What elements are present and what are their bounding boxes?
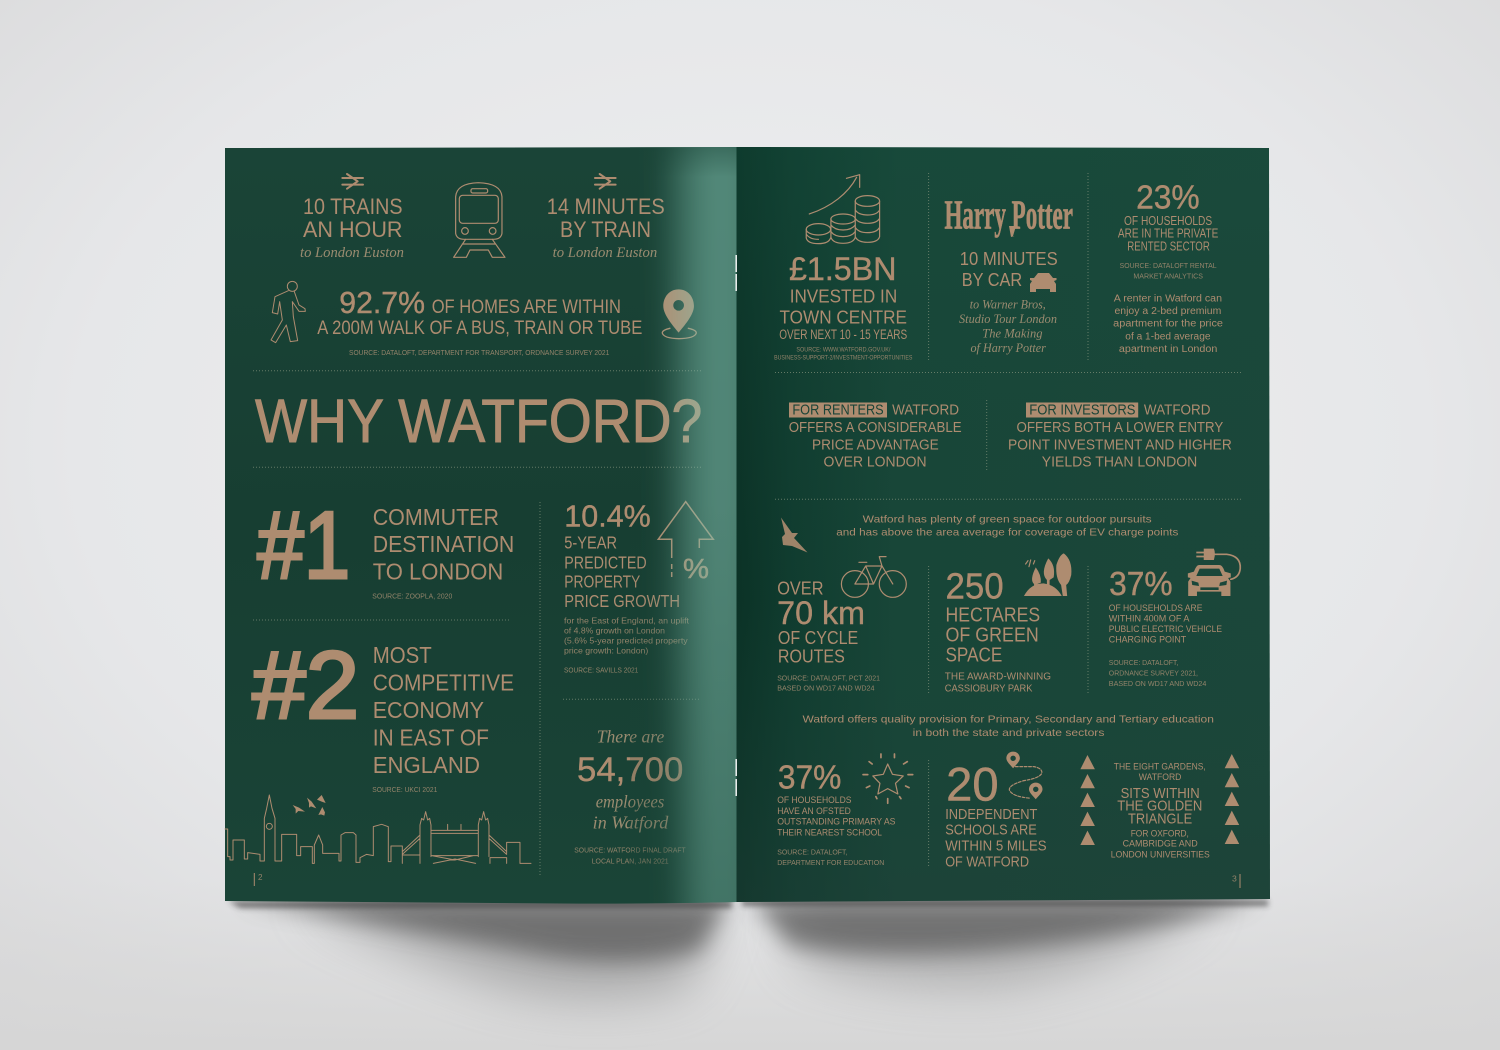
text: education intro: Watford offers quality provision for Primary, Secondary and Tertiary education: [802, 714, 1214, 726]
panel: property price growth: [564, 499, 713, 674]
panel: golden triangle: CAMBRIDGE AND: [1123, 839, 1198, 850]
panel: harry potter: to Warner Bros,: [970, 296, 1046, 311]
panel: electric vehicle charging: [1109, 549, 1240, 688]
panel: for investors: POINT INVESTMENT AND HIGHER: [1008, 436, 1232, 453]
divider: [253, 619, 511, 621]
panel: investment in town centre: BUSINESS-SUPPORT-2/INVESTMENT-OPPORTUNITIES: [774, 355, 912, 361]
panel: property price growth: 5-YEAR: [564, 533, 617, 553]
panel: property price growth: PROPERTY: [564, 572, 641, 592]
icon: national rail right: [595, 174, 616, 189]
panel: cycle routes: ROUTES: [778, 646, 845, 666]
divider: [1087, 566, 1089, 695]
panel: green space: THE AWARD-WINNING: [945, 671, 1051, 683]
panel: for investors: [1008, 402, 1232, 471]
panel: harry potter: [944, 191, 1073, 355]
divider: [775, 498, 1242, 500]
divider: [775, 372, 1242, 374]
panel: investment in town centre: £1.5BN: [789, 251, 896, 287]
panel: employees: employees: [596, 791, 664, 811]
panel: private rented sector: ARE IN THE PRIVATE: [1118, 227, 1218, 241]
icon: map pin: [662, 289, 696, 339]
panel: golden triangle: SITS WITHIN: [1121, 786, 1200, 802]
text: page number 3: [1232, 874, 1240, 888]
icon: electric car: [1188, 549, 1240, 596]
panel: cycle routes: SOURCE: DATALOFT, PCT 2021: [777, 673, 880, 682]
text: page number 2: [254, 873, 263, 886]
panel: investment in town centre: SOURCE: WWW.WATFORD.GOV.UK/: [796, 348, 891, 354]
text: 92.7% of homes: [317, 285, 642, 357]
text: 92.7% of homes: SOURCE: DATALOFT, DEPARTMENT FOR TRANSPORT, ORDNANCE SURVEY 2021: [349, 348, 609, 357]
text: education intro: [802, 714, 1214, 739]
panel: number 2 competitive economy: SOURCE: UKCI 2021: [372, 785, 437, 794]
panel: for investors: WATFORD: [1144, 402, 1211, 419]
panel: number 1 commuter destination: SOURCE: ZOOPLA, 2020: [372, 591, 452, 600]
panel: private rented sector: [1113, 179, 1223, 355]
text: 92.7% of homes: A 200M WALK OF A BUS, TRAIN OR TUBE: [317, 318, 642, 339]
icon: walking person: [271, 281, 305, 343]
panel: number 1 commuter destination: TO LONDON: [373, 558, 503, 584]
panel: independent schools: 20: [946, 758, 999, 811]
divider: [928, 173, 930, 362]
panel: independent schools: OF WATFORD: [945, 854, 1029, 871]
panel: harry potter: 10 MINUTES: [960, 248, 1058, 269]
panel: employees: [574, 727, 686, 865]
panel: ofsted: THEIR NEAREST SCHOOL: [777, 827, 882, 838]
panel: employees: LOCAL PLAN, JAN 2021: [592, 856, 669, 865]
icon: star: [863, 754, 913, 803]
panel: golden triangle: [1080, 754, 1239, 860]
panel: property price growth: PREDICTED: [564, 552, 647, 572]
panel: property price growth: for the East of England, an uplift: [564, 616, 690, 626]
panel: ofsted: SOURCE: DATALOFT,: [777, 847, 848, 856]
page fold highlight: [630, 147, 736, 903]
icon: up arrow with percent: %: [683, 553, 709, 584]
panel: left page top, train facts: [300, 174, 665, 261]
panel: employees: in Watford: [593, 812, 669, 832]
text: green space intro: Watford has plenty of green space for outdoor pursuits: [863, 514, 1152, 526]
divider: [1087, 173, 1089, 362]
panel: for renters: [789, 402, 962, 471]
panel: golden triangle: THE EIGHT GARDENS,: [1114, 761, 1206, 772]
panel: number 2 competitive economy: COMPETITIVE: [373, 669, 514, 695]
text: education intro: in both the state and private sectors: [913, 727, 1104, 739]
panel: private rented sector: enjoy a 2-bed premium: [1114, 306, 1221, 317]
text: 14 minutes: [547, 194, 665, 261]
panel: electric vehicle charging: OF HOUSEHOLDS ARE: [1109, 603, 1202, 614]
divider top: [253, 370, 703, 372]
panel: green space: OF GREEN: [946, 623, 1039, 646]
panel: electric vehicle charging: PUBLIC ELECTRIC VEHICLE: [1109, 624, 1222, 635]
book shadow: [228, 900, 1268, 998]
panel: electric vehicle charging: BASED ON WD17 AND WD24: [1109, 679, 1206, 688]
text: page number 2: 2: [258, 873, 263, 882]
panel: private rented sector: of a 1-bed average: [1125, 331, 1211, 342]
text: 10 trains: AN HOUR: [303, 217, 402, 242]
icon: triangles left: [1080, 755, 1095, 845]
text: green space intro: and has above the area average for coverage of EV charge points: [836, 526, 1178, 538]
icon: lightning tail: [1009, 226, 1016, 237]
panel: cycle routes: 70 km: [777, 595, 865, 631]
panel: walking statistic: [271, 281, 696, 357]
panel: property price growth: PRICE GROWTH: [564, 591, 680, 611]
icon: trees: [1024, 553, 1071, 596]
title: WHY WATFORD?: [255, 387, 702, 455]
panel: for renters: WATFORD: [892, 402, 959, 419]
panel: electric vehicle charging: SOURCE: DATALOFT,: [1109, 658, 1178, 667]
panel: ofsted: 37%: [778, 758, 841, 795]
panel: investment in town centre: INVESTED IN: [790, 286, 897, 307]
text: 92.7% of homes: 92.7%: [339, 285, 425, 320]
panel: green space: SPACE: [946, 643, 1002, 666]
panel: employees: 54,700: [577, 751, 683, 789]
divider: [928, 566, 930, 695]
panel: electric vehicle charging: 37%: [1109, 565, 1173, 602]
panel: for renters: FOR RENTERS: [792, 402, 884, 419]
icon: up arrow with percent: [658, 502, 713, 584]
panel: for investors: FOR INVESTORS: [1029, 402, 1136, 419]
panel: number 1 commuter destination: [257, 492, 514, 600]
divider: [928, 760, 930, 866]
panel: independent schools: WITHIN 5 MILES: [945, 838, 1047, 855]
panel: golden triangle: TRIANGLE: [1128, 812, 1192, 828]
panel: golden triangle: THE GOLDEN: [1117, 799, 1202, 815]
panel: property price growth: 10.4%: [564, 499, 651, 534]
panel: number 1 commuter destination: #1: [257, 492, 350, 599]
icon: london skyline: [225, 795, 531, 863]
panel: cycle routes: BASED ON WD17 AND WD24: [777, 683, 874, 692]
panel: private rented sector: apartment in London: [1119, 344, 1217, 355]
panel: ofsted: [777, 754, 913, 867]
panel: electric vehicle charging: ORDNANCE SURVEY 2021,: [1109, 668, 1198, 677]
text: page number 3: 3: [1232, 875, 1237, 884]
panel: investment in town centre: [774, 175, 912, 361]
panel: independent schools: [945, 752, 1047, 871]
panel: harry potter: Harry Potter: [944, 191, 1073, 237]
panel: number 1 commuter destination: COMMUTER: [373, 504, 499, 530]
panel: employees: There are: [597, 727, 664, 747]
panel: green space: HECTARES: [946, 603, 1040, 626]
panel: golden triangle: LONDON UNIVERSITIES: [1111, 849, 1210, 860]
right page background: [736, 147, 1270, 902]
icon: car: [1030, 273, 1056, 292]
panel: cycle routes: [777, 557, 906, 692]
panel: cycle routes: OF CYCLE: [778, 628, 858, 648]
panel: golden triangle: FOR OXFORD,: [1131, 829, 1189, 840]
panel: property price growth: price growth: London): [564, 645, 648, 655]
panel: private rented sector: apartment for the price: [1113, 319, 1223, 330]
panel: number 2 competitive economy: ENGLAND: [373, 752, 480, 778]
text: 92.7% of homes: OF HOMES ARE WITHIN: [432, 297, 621, 318]
panel: cycle routes: OVER: [777, 579, 824, 599]
panel: investment in town centre: TOWN CENTRE: [780, 306, 907, 327]
panel: property price growth: of 4.8% growth on London: [564, 626, 665, 636]
panel: property price growth: SOURCE: SAVILLS 2021: [564, 665, 638, 674]
panel: independent schools: SCHOOLS ARE: [945, 822, 1037, 839]
panel: private rented sector: OF HOUSEHOLDS: [1124, 214, 1212, 228]
text: 14 minutes: 14 MINUTES: [547, 194, 665, 219]
icon: bicycle: [841, 557, 906, 597]
panel: ofsted: OUTSTANDING PRIMARY AS: [777, 817, 896, 828]
text: 10 trains: [300, 194, 404, 261]
panel: number 1 commuter destination: DESTINATION: [373, 531, 514, 557]
panel: number 2 competitive economy: IN EAST OF: [373, 724, 489, 750]
left page background: [225, 147, 736, 904]
divider: [986, 400, 988, 472]
panel: private rented sector: MARKET ANALYTICS: [1133, 271, 1203, 280]
panel: number 2 competitive economy: ECONOMY: [373, 697, 484, 723]
text: 14 minutes: to London Euston: [553, 245, 657, 261]
panel: electric vehicle charging: WITHIN 400M OF A: [1109, 614, 1190, 625]
panel: for investors: OFFERS BOTH A LOWER ENTRY: [1016, 419, 1223, 436]
panel: green space: 250: [946, 565, 1004, 606]
panel: investment in town centre: OVER NEXT 10 - 15 YEARS: [779, 327, 907, 342]
divider under title: [253, 466, 703, 468]
panel: harry potter: of Harry Potter: [970, 340, 1047, 355]
panel: number 2 competitive economy: #2: [252, 632, 359, 739]
panel: number 2 competitive economy: MOST: [373, 642, 432, 668]
panel: green space: CASSIOBURY PARK: [945, 682, 1032, 694]
text: 10 trains: to London Euston: [300, 245, 404, 261]
icon: route pins: [1006, 752, 1043, 799]
icon: bird: [781, 518, 808, 552]
panel: private rented sector: SOURCE: DATALOFT RENTAL: [1120, 261, 1217, 270]
panel: number 2 competitive economy: [252, 632, 514, 794]
panel: private rented sector: A renter in Watford can: [1114, 293, 1222, 304]
panel: private rented sector: 23%: [1136, 179, 1200, 216]
text: 14 minutes: BY TRAIN: [560, 217, 651, 242]
column divider: [539, 502, 541, 875]
text: green space intro: [836, 514, 1178, 538]
panel: electric vehicle charging: CHARGING POINT: [1109, 635, 1186, 646]
icon: national rail left: [342, 174, 363, 189]
panel: harry potter: The Making: [982, 326, 1043, 341]
panel: for renters: PRICE ADVANTAGE: [812, 436, 939, 453]
panel: independent schools: INDEPENDENT: [945, 806, 1037, 823]
panel: ofsted: HAVE AN OFSTED: [777, 806, 851, 817]
panel: golden triangle: WATFORD: [1139, 772, 1182, 783]
panel: employees: SOURCE: WATFORD FINAL DRAFT: [574, 846, 686, 855]
panel: ofsted: OF HOUSEHOLDS: [777, 795, 852, 806]
icon: coins with arrow: [806, 175, 880, 244]
icon: train: [454, 183, 505, 257]
panel: property price growth: (5.6% 5-year predicted property: [564, 636, 688, 646]
panel: ofsted: DEPARTMENT FOR EDUCATION: [777, 858, 884, 867]
panel: for renters: OVER LONDON: [824, 454, 927, 471]
icon: triangles right: [1225, 754, 1239, 844]
panel: harry potter: BY CAR: [962, 269, 1022, 290]
panel: for investors: YIELDS THAN LONDON: [1042, 454, 1197, 471]
panel: green space: [945, 553, 1071, 694]
panel: private rented sector: RENTED SECTOR: [1127, 239, 1210, 253]
panel: harry potter: Studio Tour London: [959, 311, 1057, 326]
panel: for renters: OFFERS A CONSIDERABLE: [789, 419, 962, 436]
divider: [563, 698, 701, 700]
spine staples: [736, 255, 737, 796]
text: 10 trains: 10 TRAINS: [303, 194, 402, 219]
